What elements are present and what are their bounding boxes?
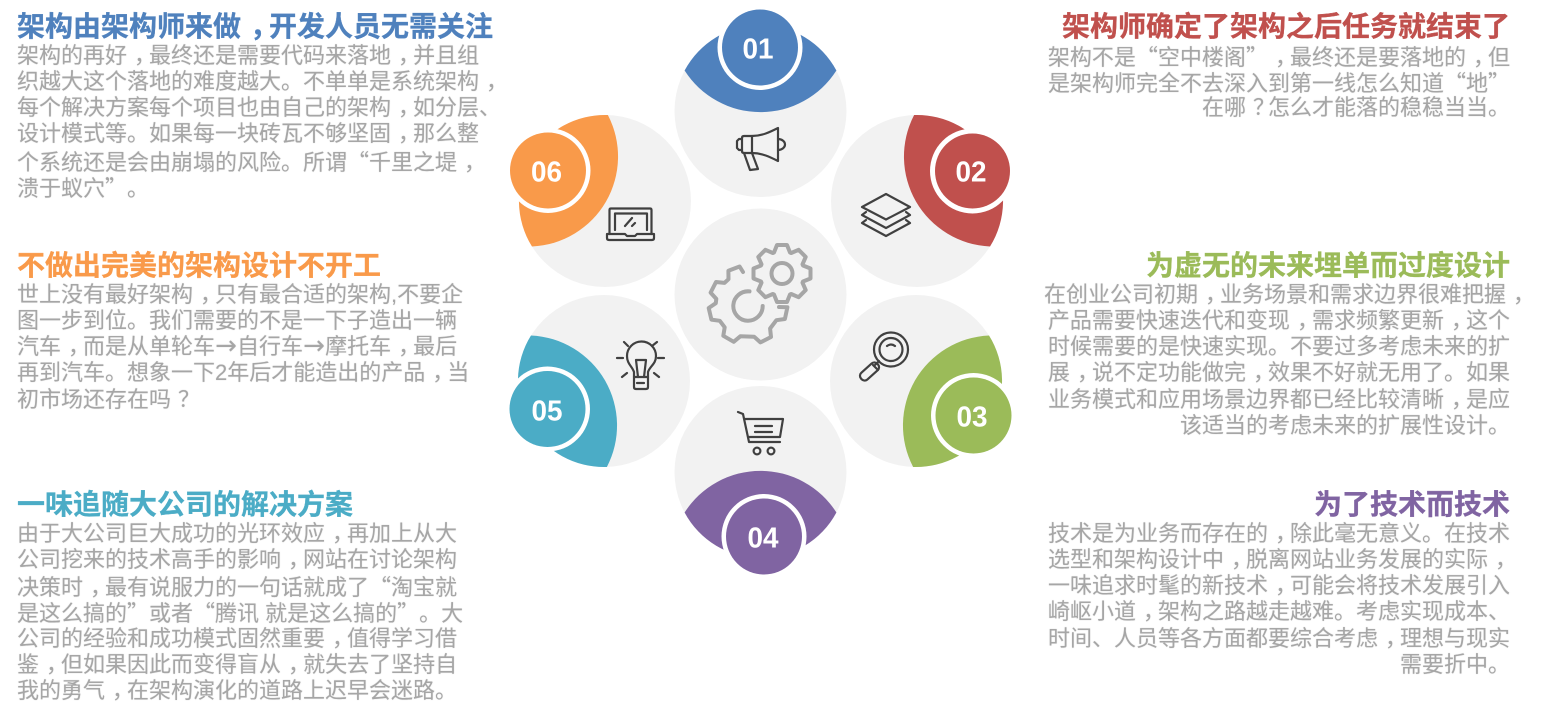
body text: 架构的再好 ，最终还是需要代码来落地 ，并且组 [17,42,479,68]
background circle 02 [831,115,1003,287]
body text: 汽车 ，而是从单轮车 自行车 摩托车 ，最后 [17,334,457,359]
body text: “ [1444,66,1466,98]
icon: stacked layers [862,194,910,236]
number badge 04: 04 [748,522,778,554]
icon: magnifying glass [858,332,908,382]
body text: 设计模式等。如果每一块砖瓦不够坚固 ，那么整 [17,121,479,146]
body text: 溃于蚁穴 。 [17,176,149,201]
text block: 为虚无的未来埋单而过度设计 [1044,250,1535,438]
body text: → [303,331,325,361]
crescent 01 [685,25,836,112]
heading: 为了技术而技术 [1314,489,1510,520]
body text: 在创业公司初期 ，业务场景和需求边界很难把握 ， [1044,282,1535,306]
text block: 为了技术而技术 [1048,489,1517,677]
body text: 公司的经验和成功模式固然重要 ，值得学习借 [17,626,457,651]
background circle 01 [674,25,846,197]
body text: “ [1136,40,1158,72]
body text [1044,282,1535,438]
number badge 06: 06 [531,156,562,188]
heading: 一味追随大公司的解决方案 [17,489,353,520]
background circle 03 [830,295,1002,467]
body text: 选型和架构设计中 ，脱离网站业务发展的实际 ， [1048,547,1517,572]
body text: 需要折中。 [1400,652,1510,677]
body text: 世上没有最好架构 ，只有最合适的架构,不要企 [17,282,463,306]
number badge 03 [931,373,1016,458]
body text: “ [193,596,215,628]
background circle 05 [518,295,690,467]
body text: 个系统还是会由崩塌的风险。所谓 千里之堤 ， [17,150,486,175]
body text: 时候需要的是快速实现。不要过多考虑未来的扩 [1048,334,1510,359]
text block: 一味追随大公司的解决方案 [17,489,463,703]
body text: “ [347,145,369,177]
body text: 架构不是 空中楼阁 ，最终还是要落地的 ，但 [1048,44,1510,70]
text block: 架构师确定了架构之后任务就结束了 [1048,11,1510,120]
body text: 初市场还存在吗 ？ [17,387,200,412]
text block: 不做出完美的架构设计不开工 [17,250,469,412]
body text: 由于大公司巨大成功的光环效应 ，再加上从大 [17,520,457,546]
heading: 为虚无的未来埋单而过度设计 [1146,250,1510,281]
background circle 06 [519,115,691,287]
icon: gears [709,245,810,342]
body text [1048,40,1510,120]
crescent 04 [685,471,836,558]
body text [17,520,463,703]
body text: 展 ，说不定功能做完 ，效果不好就无用了。如果 [1048,360,1510,385]
heading: 架构由架构师来做 ，开发人员无需关注 [17,11,493,42]
body text: 每个解决方案每个项目也由自己的架构 ，如分层、 [17,95,501,120]
number badge 02 [930,128,1015,214]
body text: 该适当的考虑未来的扩展性设计。 [1180,413,1510,438]
body text: 我的勇气 ，在架构演化的道路上迟早会迷路。 [17,678,457,703]
body text: 时间、人员等各方面都要综合考虑 ，理想与现实 [1048,626,1510,651]
body text: 产品需要快速迭代和变现 ，需求频繁更新 ，这个 [1048,308,1510,333]
body text: ” [105,171,127,203]
number badge 06 [506,128,590,213]
center circle [674,208,846,380]
number badge 02: 02 [956,156,986,188]
body text: ” [127,596,149,628]
number badge 01: 01 [742,34,774,66]
body text [17,282,469,412]
body text: 是架构师完全不去深入到第一线怎么知道 地 [1048,71,1488,96]
number badge 03: 03 [956,402,988,434]
body text: 崎岖小道 ，架构之路越走越难。考虑实现成本、 [1048,599,1510,624]
number badge 05: 05 [532,396,562,428]
body text: 在哪 ？怎么才能落的稳稳当当。 [1202,95,1510,120]
body text [17,42,508,203]
body text: 图一步到位。我们需要的不是一下子造出一辆 [17,308,457,333]
icon: megaphone [737,128,785,170]
icon: laptop [607,208,654,240]
number badge 05 [505,366,590,452]
text block: 架构由架构师来做 [17,11,508,203]
body text: “ [369,570,391,602]
body text: 再到汽车。想象一下2年后才能造出的产品 ，当 [17,360,469,385]
body text: 决策时 ，最有说服力的一句话就成了 淘宝就 [17,575,457,600]
body text: 织越大这个落地的难度越大。不单单是系统架构 ， [17,69,508,94]
icon: light bulb [617,342,664,389]
number badge 01 [718,5,802,90]
background circle 04 [674,386,846,558]
body text: ” [1246,40,1268,72]
crescent 02 [878,92,1029,267]
body text: 鉴 ，但如果因此而变得盲从 ，就失去了坚持自 [17,652,457,677]
body text: → [215,331,237,361]
heading: 不做出完美的架构设计不开工 [17,250,381,281]
heading: 架构师确定了架构之后任务就结束了 [1062,11,1510,42]
crescent 03 [877,315,1028,490]
body text: 一味追求时髦的新技术 ，可能会将技术发展引入 [1048,573,1510,598]
body text: ” [397,596,419,628]
number badge 04 [722,494,806,579]
body text [1048,520,1517,677]
body text: ” [1488,66,1510,98]
body text: 业务模式和应用场景边界都已经比较清晰 ，是应 [1048,387,1510,412]
icon: shopping cart [738,412,783,454]
crescent 06 [493,92,644,267]
body text: 技术是为业务而存在的 ，除此毫无意义。在技术 [1048,520,1510,546]
crescent 05 [492,315,643,490]
body text: 公司挖来的技术高手的影响 ，网站在讨论架构 [17,547,457,572]
body text: 是这么搞的 或者 腾讯 就是这么搞的 。大 [17,601,463,626]
